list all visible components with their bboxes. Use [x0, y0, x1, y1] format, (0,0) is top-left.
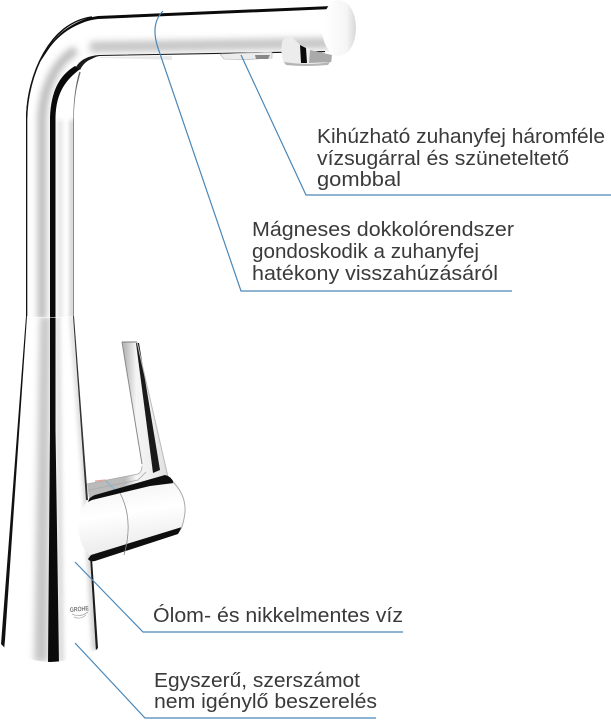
callout: pull-out spray	[241, 55, 611, 195]
callout: easy installation	[75, 643, 377, 718]
lever cylinder	[78, 475, 185, 561]
faucet illustration	[0, 0, 356, 670]
pull-out spray head	[220, 0, 356, 66]
GROHE logo: GROHE	[70, 605, 90, 614]
callout text: gondoskodik a zuhanyfej	[252, 241, 479, 263]
callout: lead and nickel free	[75, 562, 403, 632]
callout text: gombbal	[317, 169, 401, 191]
GROHE logo	[70, 605, 90, 618]
callout text: nem igénylő beszerelés	[154, 691, 377, 713]
callout text	[154, 670, 377, 713]
base seam	[26, 313, 74, 316]
callout text: Ólom- és nikkelmentes víz	[153, 604, 403, 627]
faucet lever handle	[87, 342, 168, 505]
faucet upper tube and spout	[20, 0, 340, 320]
leader line	[75, 643, 376, 718]
leader line	[241, 55, 611, 195]
leader line	[75, 562, 403, 632]
callout text	[317, 126, 605, 191]
callout text: vízsugárral és szüneteltető	[317, 148, 569, 170]
faucet lower conical body	[1, 316, 98, 662]
callout text: hatékony visszahúzásáról	[252, 263, 498, 285]
leader line	[155, 11, 512, 291]
callout text: Kihúzható zuhanyfej háromféle	[317, 126, 605, 148]
callout: magnetic docking	[155, 11, 514, 291]
callout text: Egyszerű, szerszámot	[154, 670, 360, 692]
callout text: Mágneses dokkolórendszer	[252, 219, 514, 241]
callout text	[252, 219, 514, 285]
